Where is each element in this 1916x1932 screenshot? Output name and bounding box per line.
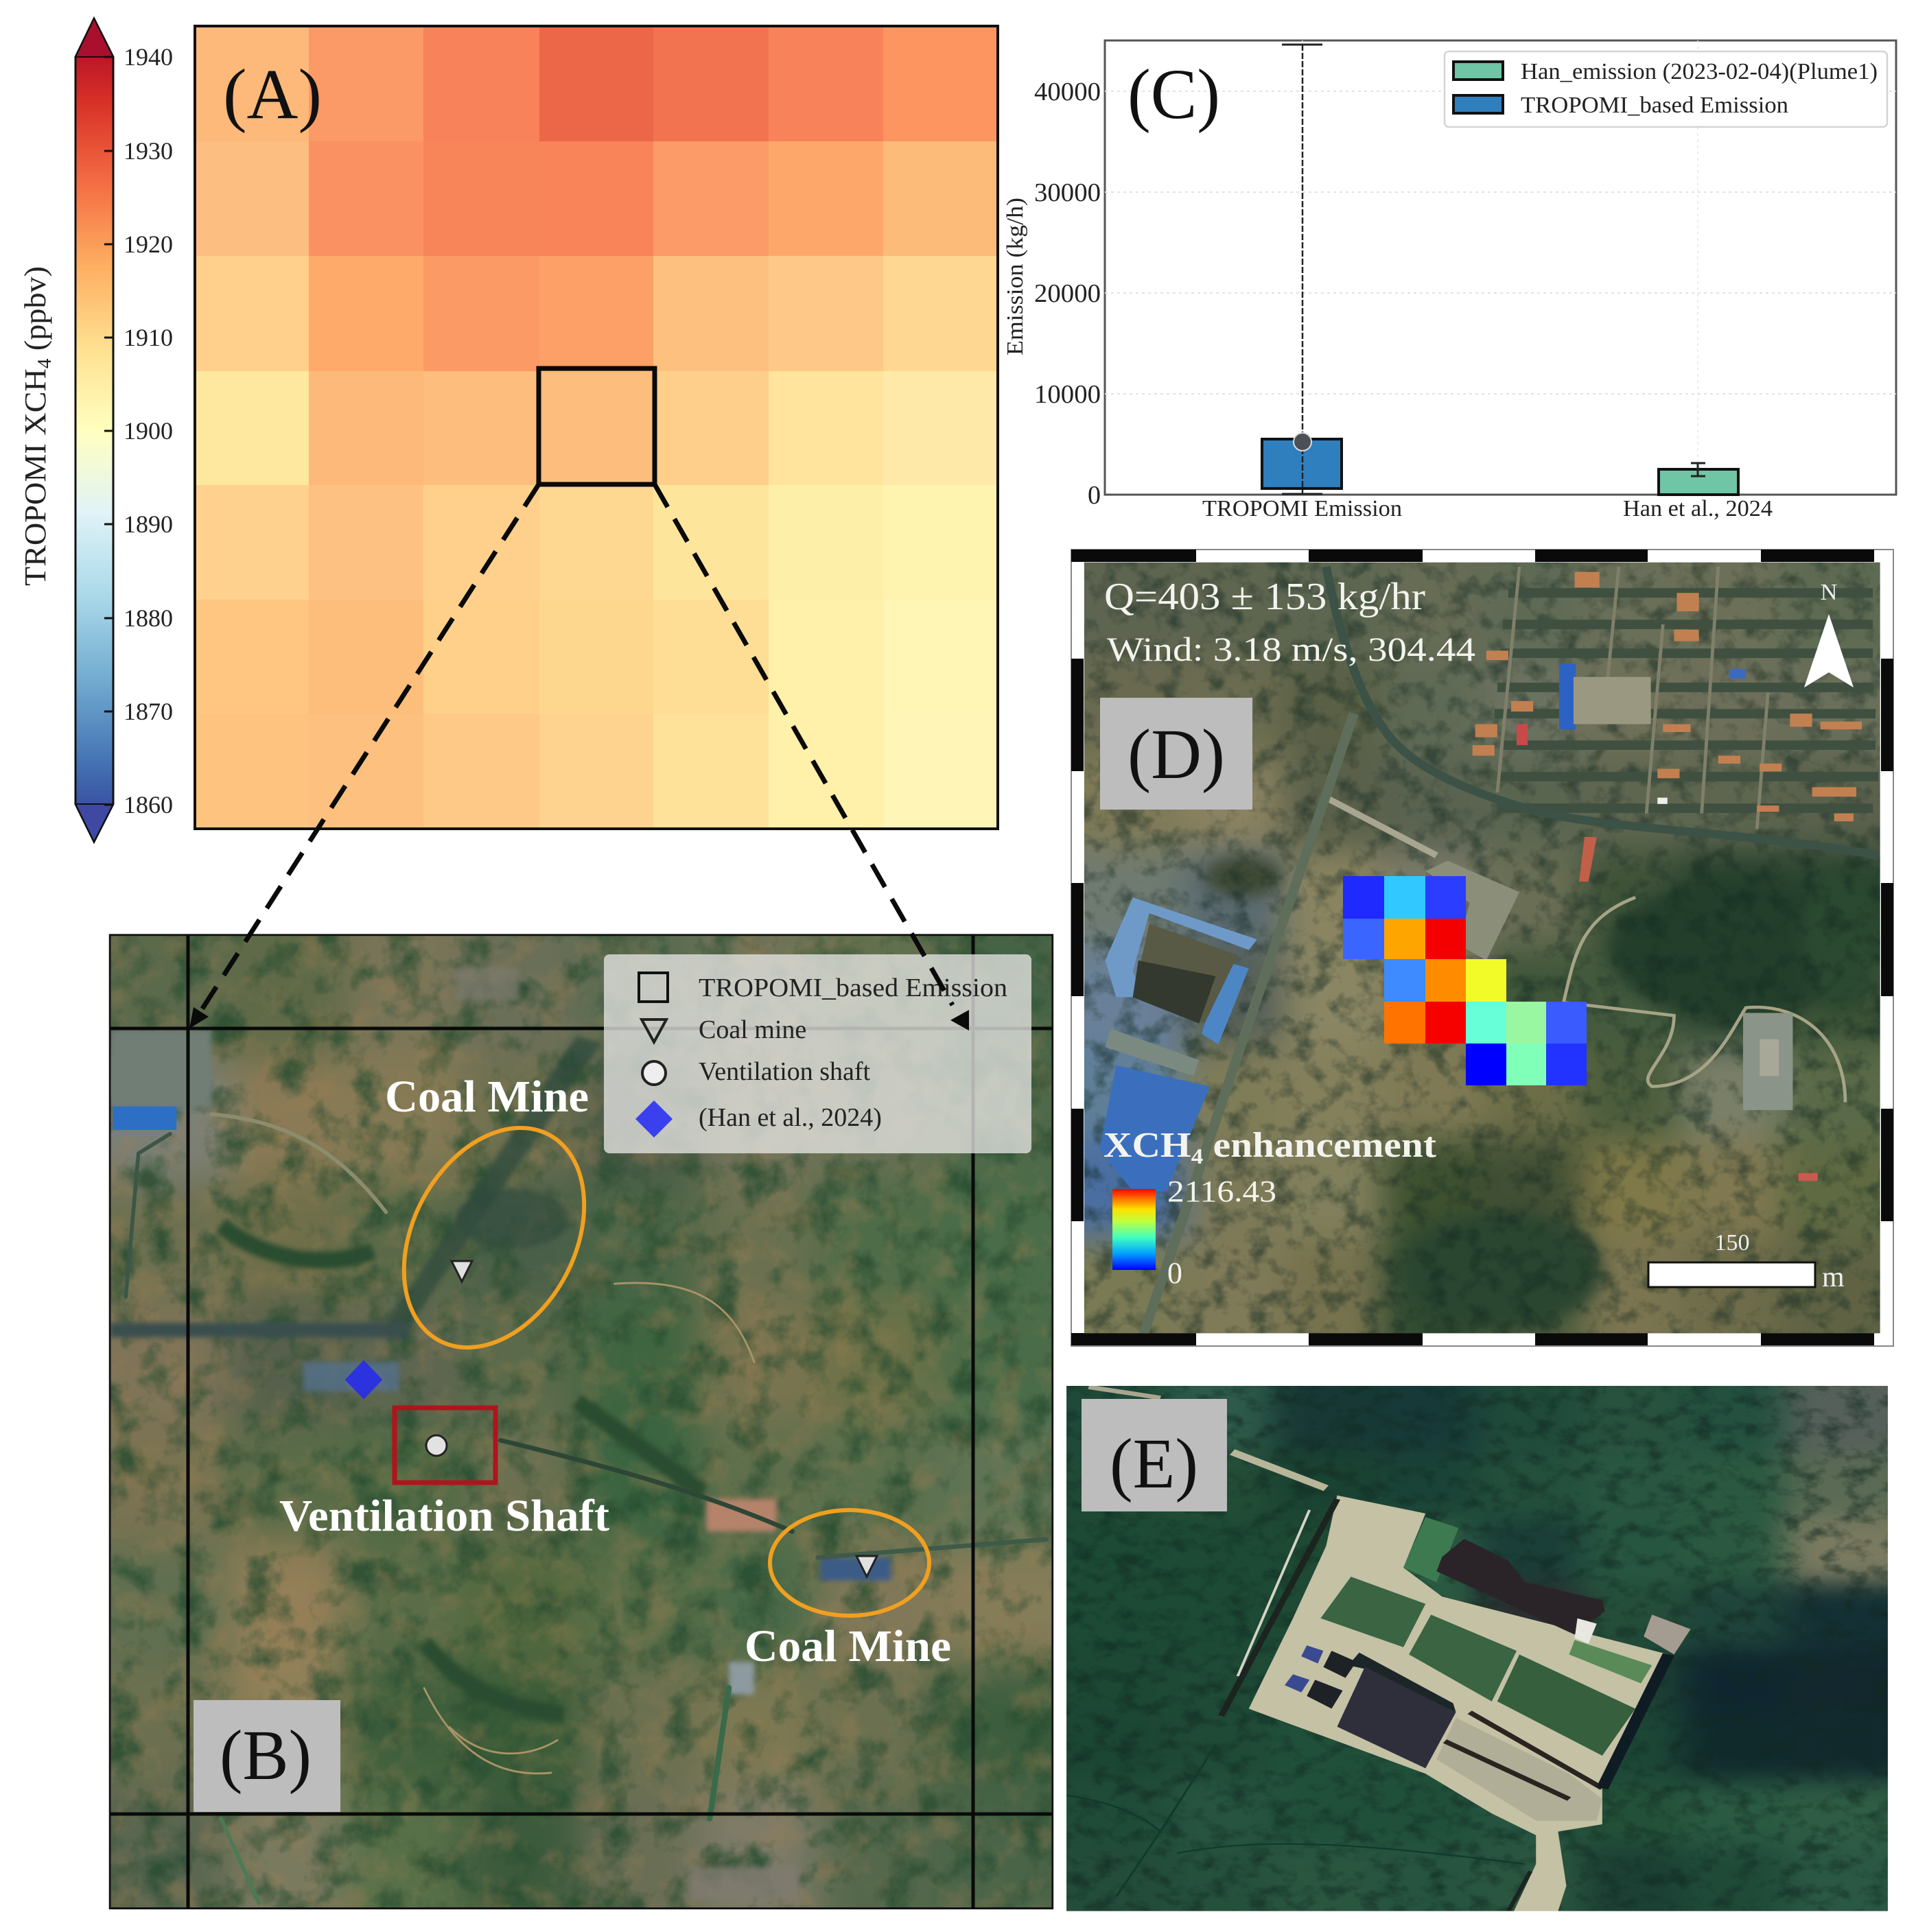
north arrow	[1804, 580, 1854, 687]
ventilation shaft red box	[395, 1408, 495, 1483]
north arrow: N	[1821, 580, 1837, 605]
label box (E): (E)	[1110, 1424, 1198, 1503]
label: Coal Mine upper: Coal Mine	[385, 1072, 589, 1122]
enhancement colorbar: 2116.43	[1167, 1175, 1276, 1208]
y axis tick labels: 0	[1088, 481, 1101, 510]
coal mine ellipse 1	[368, 1097, 620, 1378]
concrete site	[1249, 1496, 1668, 1911]
panel C: emission bar chart	[1003, 40, 1896, 521]
label: Ventilation Shaft: Ventilation Shaft	[279, 1491, 609, 1541]
panel A: TROPOMI XCH4 heat map	[195, 26, 998, 829]
enhancement legend title: XCH	[1103, 1126, 1183, 1165]
colorbar for panel A: 1870	[124, 698, 173, 725]
legend for panel C: TROPOMI_based Emission	[1521, 93, 1788, 118]
enhancement legend title: 4	[1191, 1144, 1203, 1168]
label (C): (C)	[1128, 55, 1220, 134]
gardens	[1320, 1577, 1425, 1647]
legend for panel B: (Han et al., 2024)	[699, 1103, 882, 1132]
panel D: plume satellite map	[1071, 549, 1894, 1347]
legend for panel B: Ventilation shaft	[699, 1057, 871, 1086]
colorbar for panel A	[75, 19, 173, 842]
marker: coal mine triangle 2	[856, 1556, 877, 1577]
label box (D)	[1100, 698, 1252, 810]
map frame with checker ticks	[1071, 550, 1893, 1346]
label: Coal Mine lower: Coal Mine	[745, 1621, 951, 1671]
label box (D): (D)	[1128, 715, 1225, 794]
legend for panel C	[1445, 51, 1887, 127]
bar: TROPOMI emission	[1262, 45, 1342, 494]
marker: coal mine triangle 1	[452, 1261, 472, 1282]
colorbar axis label: TROPOMI XCH	[19, 379, 52, 586]
y axis tick labels: 20000	[1034, 279, 1101, 308]
y axis tick labels: 30000	[1034, 178, 1101, 207]
colorbar for panel A: 1930	[124, 137, 173, 165]
legend for panel B: TROPOMI_based Emission	[699, 974, 1007, 1002]
legend for panel B: Coal mine	[699, 1015, 806, 1044]
plume enhancement grid	[1343, 876, 1587, 1085]
label box (B)	[194, 1700, 340, 1812]
colorbar for panel A: 1890	[124, 510, 173, 538]
label box (B): (B)	[220, 1716, 312, 1795]
bar: Han et al 2024	[1659, 463, 1738, 495]
marker: ventilation shaft	[426, 1435, 447, 1456]
buildings	[1436, 1539, 1605, 1634]
colorbar for panel A: 1940	[124, 43, 173, 71]
dashed arrow left	[189, 484, 539, 1028]
legend for panel B	[604, 954, 1031, 1153]
y axis tick labels	[1034, 78, 1101, 510]
enhancement colorbar	[1112, 1175, 1276, 1290]
factories	[1105, 897, 1257, 997]
satellite imagery	[1084, 563, 1880, 1334]
scale bar: 150	[1714, 1230, 1750, 1256]
emission rate text: Q=403 ± 153 kg/hr	[1104, 576, 1425, 618]
colorbar for panel A: 1920	[124, 231, 173, 258]
colorbar for panel A: 1860	[124, 791, 173, 818]
colorbar axis label: 4	[34, 359, 56, 368]
colorbar axis label: (ppbv)	[19, 266, 52, 359]
x axis label: Han et al., 2024: Han et al., 2024	[1623, 496, 1773, 521]
legend for panel C: Han_emission (2023-02-04)(Plume1)	[1521, 59, 1878, 84]
selected pixel square	[539, 368, 655, 484]
colorbar for panel A: 1900	[124, 417, 173, 445]
enhancement colorbar: 0	[1167, 1256, 1182, 1290]
colorbar for panel A: 1880	[124, 604, 173, 632]
dashed arrow right	[655, 484, 969, 1030]
y axis label: Emission (kg/h)	[1003, 198, 1028, 355]
wind text: Wind: 3.18 m/s, 304.44	[1107, 630, 1475, 668]
y axis tick labels: 10000	[1034, 380, 1101, 409]
x axis label: TROPOMI Emission: TROPOMI Emission	[1202, 496, 1402, 521]
TROPOMI grid lines over map	[110, 935, 1053, 1909]
y axis tick labels: 40000	[1034, 78, 1101, 106]
label (A): (A)	[223, 55, 322, 134]
scale bar	[1648, 1230, 1845, 1293]
village rows	[1144, 567, 1878, 1333]
panel B: satellite map of coal mine area	[30, 484, 1125, 1932]
label box (E)	[1082, 1399, 1227, 1511]
enhancement legend title: enhancement	[1203, 1126, 1437, 1165]
scale bar: m	[1822, 1262, 1845, 1293]
panel E: ventilation shaft satellite close-up	[1066, 1386, 1888, 1911]
marker: Han et al diamond	[346, 1361, 382, 1398]
coal mine ellipse 2	[770, 1510, 929, 1616]
colorbar for panel A: 1910	[124, 324, 173, 351]
